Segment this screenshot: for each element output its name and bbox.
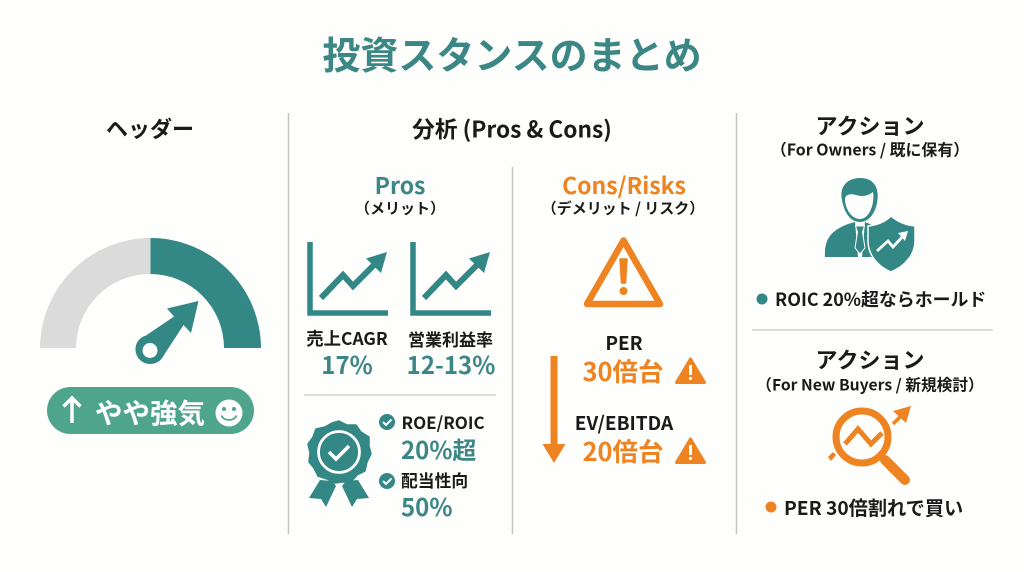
bullet: buyers (766, 502, 776, 512)
metric: sales CAGR: 売上CAGR (306, 326, 388, 351)
title: 投資スタンスのまとめ (322, 25, 702, 80)
cons subheading: （デメリット / リスク） (542, 198, 704, 218)
icon: growth chart 2 (413, 242, 491, 313)
metric: EV/EBITDA: EV/EBITDA (575, 409, 674, 436)
stance pill (47, 387, 254, 434)
icon: magnifier with trend (828, 406, 911, 480)
action text: buyers: PER 30倍割れで買い (784, 493, 963, 521)
metric: PER: PER (605, 329, 643, 356)
cons heading: Cons/Risks (562, 167, 686, 201)
heading: action buyers: アクション (816, 343, 924, 375)
heading: analysis: 分析 (Pros & Cons) (412, 112, 612, 144)
gauge needle (136, 301, 198, 364)
icon: small warning 1 (676, 359, 704, 382)
panel: pros (306, 167, 495, 523)
value: ROE/ROIC: 20%超 (401, 431, 476, 466)
gauge: teal arc (150, 238, 261, 348)
check: ROE/ROIC (379, 414, 395, 430)
icon: up arrow (64, 398, 80, 423)
subheading: buyers: （For New Buyers / 新規検討） (756, 372, 984, 396)
gauge: grey arc (40, 238, 150, 348)
panel: header gauge (40, 112, 261, 434)
icon: investor with shield (825, 178, 915, 272)
heading: header: ヘッダー (106, 112, 194, 144)
value: payout ratio: 50% (401, 488, 452, 523)
arrow: down (542, 356, 566, 463)
metric: operating margin: 営業利益率 (408, 326, 493, 351)
panel: cons (542, 167, 704, 469)
heading: action owners: アクション (816, 109, 924, 141)
panel: action for owners (756, 109, 986, 312)
value: sales CAGR: 17% (321, 346, 373, 381)
icon: growth chart 1 (310, 242, 388, 313)
check: payout (379, 473, 395, 489)
pill label: やや強気 (95, 391, 205, 431)
pros heading: Pros (375, 167, 425, 201)
icon: small warning 2 (676, 439, 704, 462)
panel: action for new buyers (756, 343, 984, 521)
value: operating margin: 12-13% (407, 346, 495, 381)
subheading: owners: （For Owners / 既に保有） (771, 138, 969, 160)
icon: smiley (216, 400, 242, 426)
pros subheading: （メリット） (355, 198, 445, 218)
metric: payout ratio: 配当性向 (401, 468, 468, 492)
metric: ROE/ROIC: ROE/ROIC (402, 409, 485, 434)
value: PER: 30倍台 (582, 352, 664, 389)
action text: owners: ROIC 20%超ならホールド (775, 286, 986, 312)
icon: warning triangle (587, 240, 660, 304)
icon: award badge (308, 421, 371, 507)
value: EV/EBITDA: 20倍台 (582, 432, 664, 469)
bullet: owners (756, 294, 768, 304)
